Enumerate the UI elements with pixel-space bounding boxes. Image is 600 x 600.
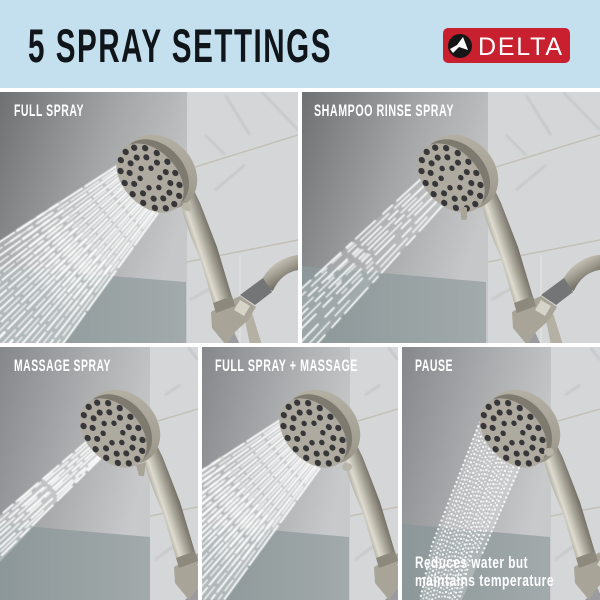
heading: MASSAGE SPRAY [14, 357, 111, 375]
icon: shower head [279, 390, 398, 600]
spray toggle button [461, 207, 467, 220]
heading: PAUSE [415, 357, 453, 375]
spray toggle button [182, 202, 191, 212]
panel: full spray + massage [202, 347, 398, 600]
logo: Delta [443, 28, 570, 63]
water spray [0, 165, 158, 345]
spray toggle button [342, 463, 352, 471]
icon: shower head [418, 134, 600, 343]
title: 5 SPRAY SETTINGS [28, 19, 332, 72]
water spray [300, 177, 443, 345]
water droplets [420, 420, 520, 600]
icon: shower head [116, 134, 298, 343]
heading: FULL SPRAY + MASSAGE [215, 357, 358, 375]
logo: Delta: DELTA [478, 33, 562, 61]
panel: full spray [0, 92, 302, 345]
water spray [0, 441, 102, 562]
heading: SHAMPOO RINSE SPRAY [314, 102, 454, 120]
panel: massage spray [0, 347, 198, 600]
icon: shower head [80, 390, 198, 600]
panel: pause [402, 347, 600, 600]
spray toggle button [544, 448, 554, 456]
panel: shampoo rinse spray [300, 92, 600, 345]
caption: Reduces water but [415, 553, 528, 572]
header band [0, 0, 600, 88]
icon: shower head [479, 390, 600, 600]
heading: FULL SPRAY [14, 102, 84, 120]
caption [416, 556, 554, 590]
spray toggle button [136, 462, 146, 476]
water spray [202, 419, 321, 600]
